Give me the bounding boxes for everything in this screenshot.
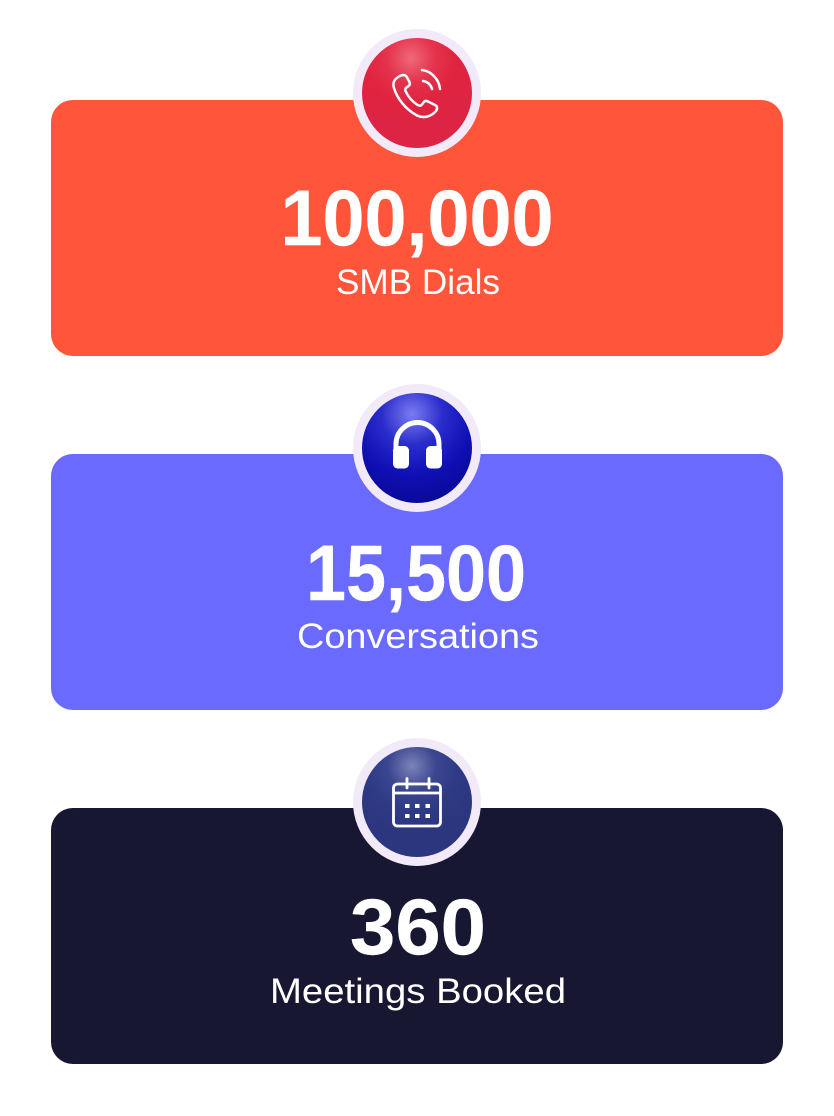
panel: meetings booked: [51, 738, 783, 1064]
icon badge: phone call: [353, 29, 481, 157]
stat: 100,000: 100,000: [280, 173, 554, 262]
label: Conversations: Conversations: [297, 617, 539, 656]
stat: 360: 360: [350, 882, 486, 971]
stat: 15,500: 15,500: [306, 528, 526, 617]
card background: navy: [51, 808, 783, 1064]
card background: periwinkle: [51, 454, 783, 710]
icon badge: headphones: [353, 384, 481, 512]
icon badge: calendar: [353, 738, 481, 866]
panel: conversations: [51, 384, 783, 710]
card background: orange: [51, 100, 783, 356]
label: Meetings Booked: Meetings Booked: [270, 972, 566, 1011]
panel: SMB dials: [51, 29, 783, 356]
label: SMB Dials: SMB Dials: [336, 263, 500, 302]
